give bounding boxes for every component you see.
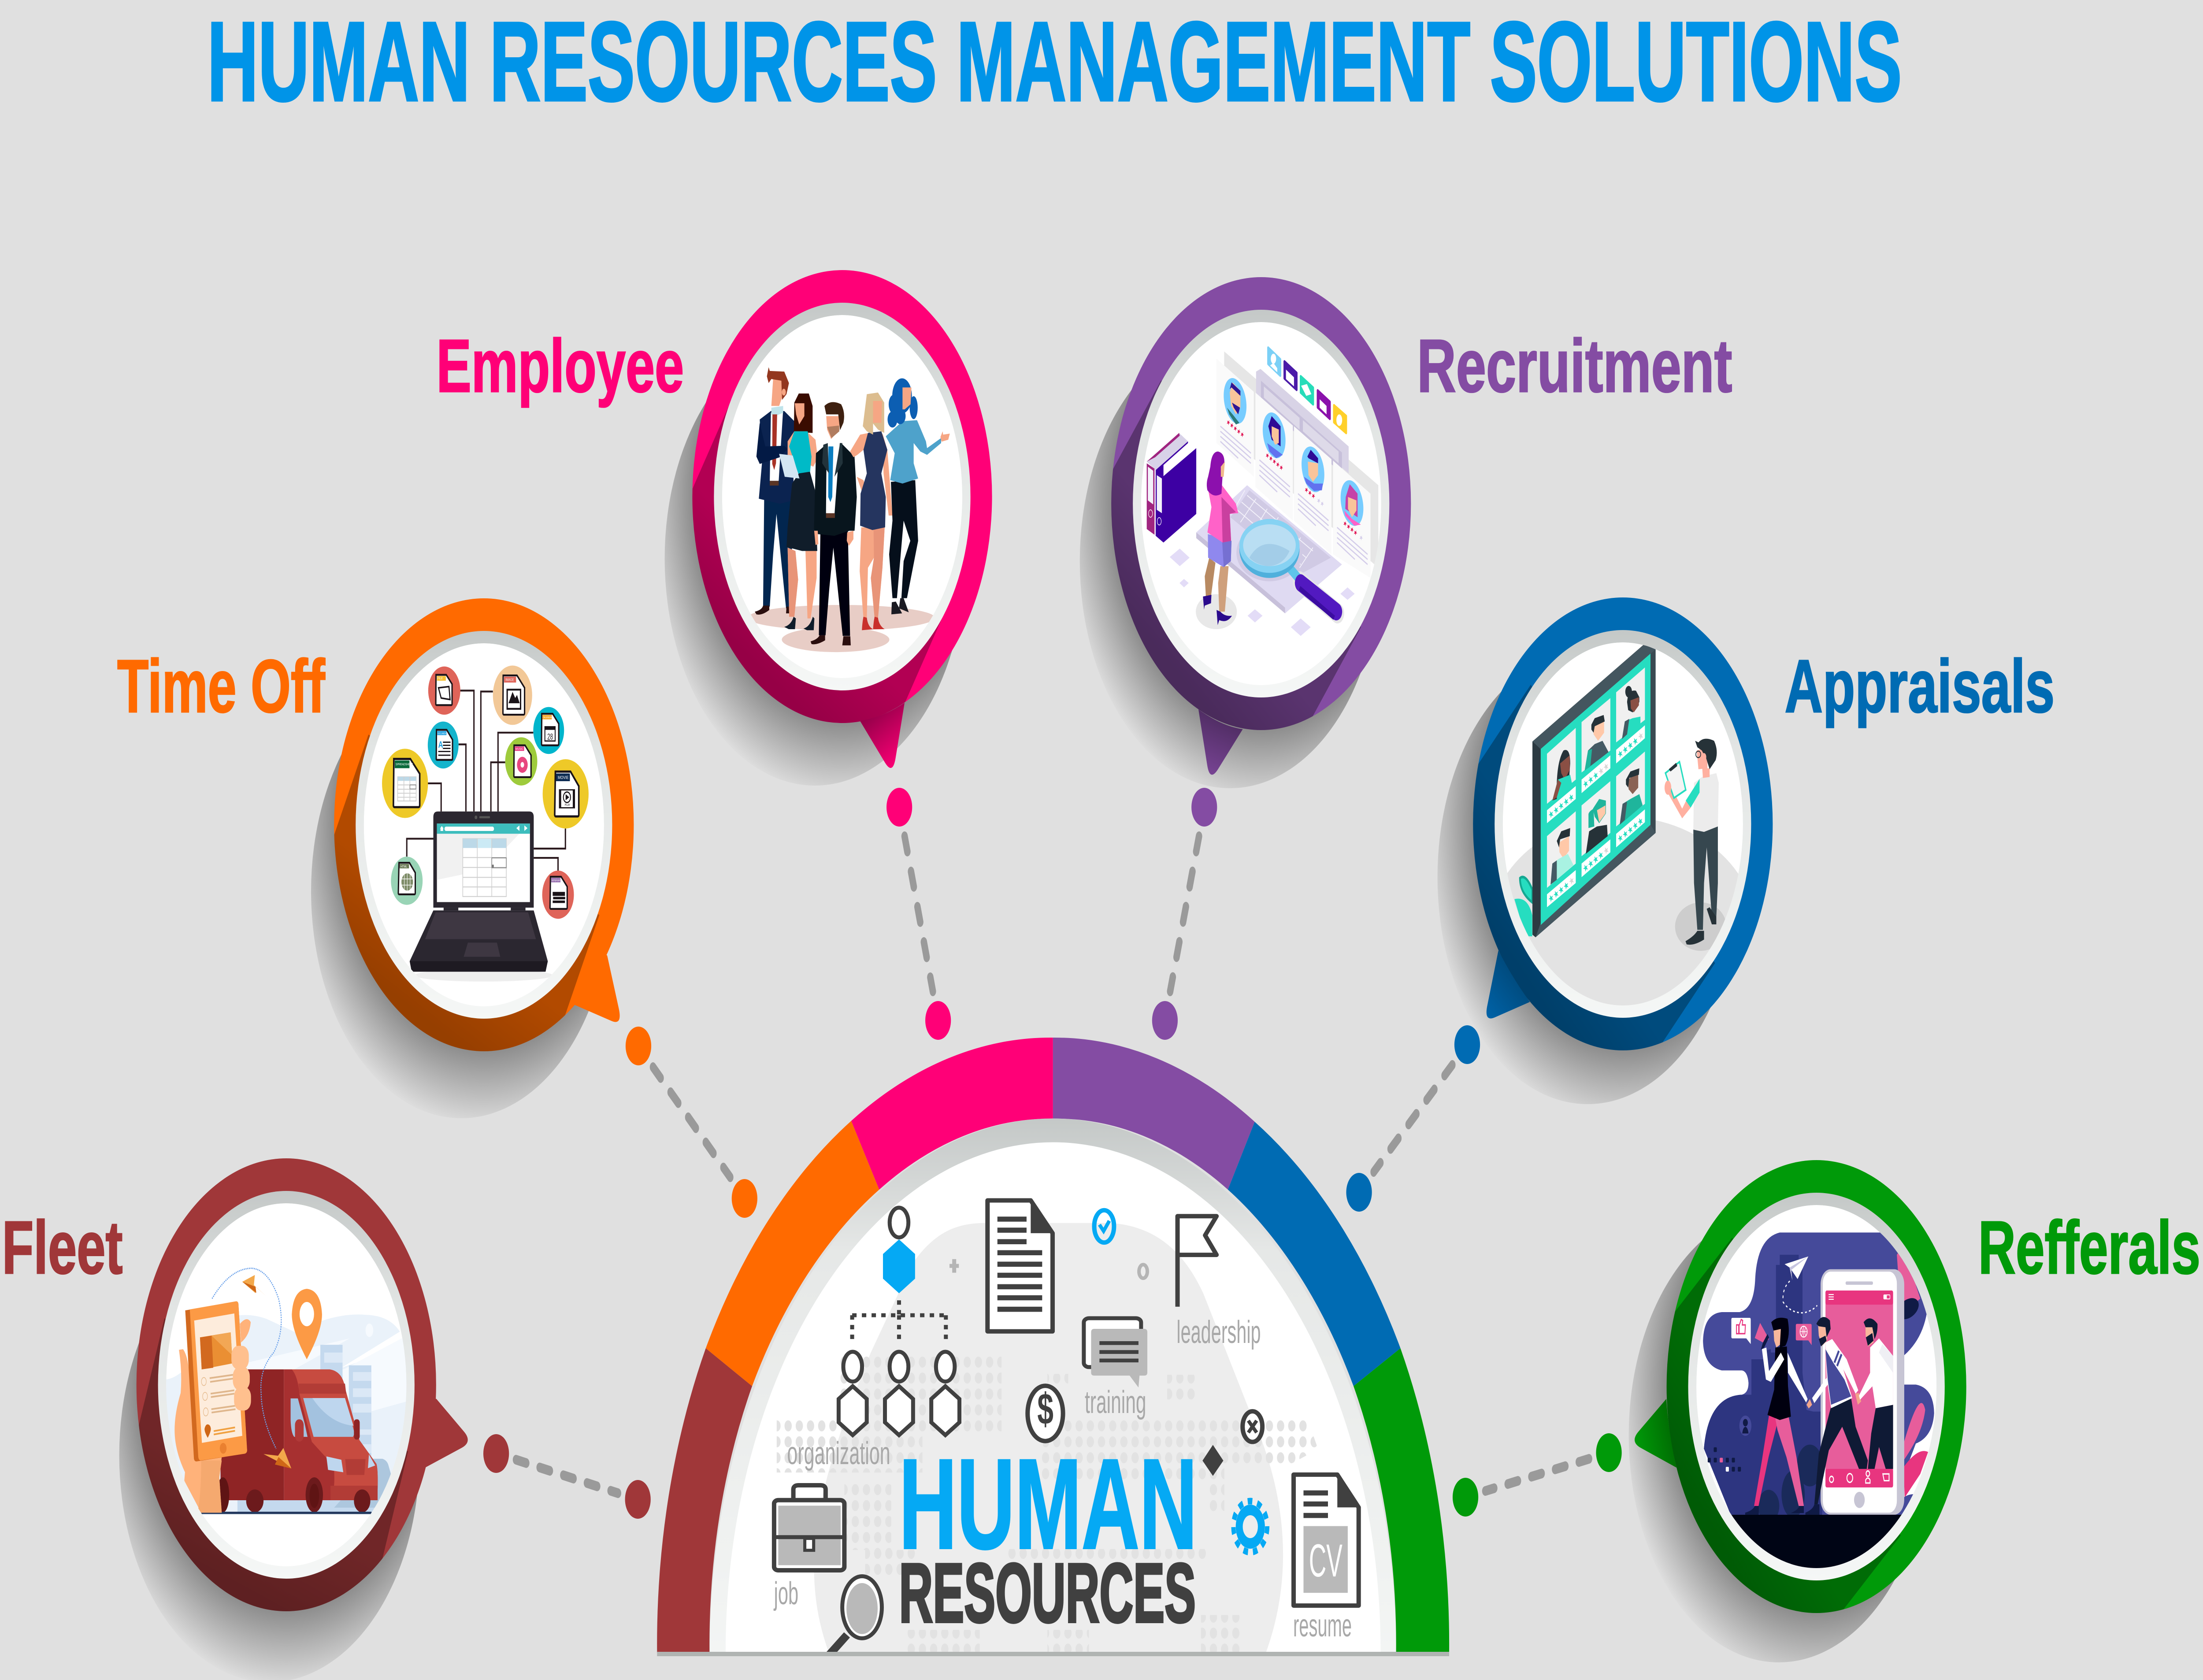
- file icon: document: A: [438, 739, 443, 750]
- inner ring: [709, 1118, 1396, 1653]
- paper planes and path: [212, 1268, 291, 1469]
- pointer dot: Employee: [886, 788, 912, 827]
- file icon: calendar: [533, 707, 564, 754]
- arc anchor dot: Employee: [925, 1001, 951, 1040]
- illustration: laptop with file icons: [364, 643, 604, 1006]
- connector lines: [407, 690, 565, 871]
- inner ring: Appraisals: [1495, 630, 1751, 1018]
- CV text: CV: [1309, 1534, 1343, 1586]
- candidate card 1: ★★★★★: [1225, 417, 1245, 439]
- paper plane: [1783, 1257, 1817, 1313]
- man in black suit: [811, 402, 857, 645]
- plant: [1514, 877, 1532, 936]
- ring: Time Off: [334, 598, 634, 1051]
- phone: [1821, 1269, 1904, 1515]
- file icon: document: DOCUMENT: [438, 732, 447, 734]
- candidate card 2: [1255, 393, 1293, 521]
- long shadow band: Appraisals: [1386, 685, 1715, 1182]
- portrait card row 1 col 2: ★★★: [1581, 768, 1600, 790]
- woman with teal top: [779, 393, 818, 630]
- pointer dot: Appraisals: [1454, 1025, 1480, 1064]
- label: Appraisals: Appraisals: [1785, 645, 2055, 728]
- connector: Time Off: [653, 1067, 730, 1177]
- connector: Recruitment: [1170, 836, 1199, 991]
- portrait card row 2 col 1: ★: [1567, 874, 1576, 887]
- rating frame: [1532, 645, 1656, 937]
- icon: flag: [1178, 1216, 1216, 1307]
- portrait card row 1 col 1: ★★★★★: [1547, 790, 1576, 821]
- connector: Refferals: [1485, 1459, 1589, 1491]
- word: training: training: [1085, 1384, 1146, 1420]
- candidate card 4: ★: [1358, 533, 1364, 542]
- world map backdrop: [777, 1223, 1318, 1652]
- bubble: Fleet: [95, 1158, 509, 1680]
- floor: [747, 605, 935, 652]
- long shadow band: Recruitment: [1033, 380, 1361, 864]
- inner ring: Recruitment: [1133, 310, 1389, 697]
- file icon: music: MUSIC: [516, 747, 523, 751]
- candidate card 3: ★★★: [1303, 485, 1317, 501]
- icon: diamond: [1202, 1445, 1224, 1476]
- icon: document: [987, 1201, 1053, 1331]
- icon: CV document: [1294, 1475, 1359, 1606]
- hub white panel with icons: [700, 1101, 1399, 1674]
- tail: Employee: [860, 703, 905, 768]
- purple backdrop: [1703, 1232, 1934, 1522]
- arc anchor dot: Time Off: [732, 1179, 757, 1218]
- portrait card row 2 col 2: [1581, 781, 1610, 877]
- woman inspecting: [1196, 452, 1238, 629]
- inner ring: Employee: [714, 303, 971, 690]
- portrait card row 2 col 1: [1547, 811, 1576, 907]
- file icon: movie: PLAY: [565, 803, 570, 807]
- illustration: Fleet delivery van: [166, 1203, 407, 1566]
- portrait card row 1 col 3: ★: [1636, 729, 1645, 742]
- file icon: movie: [543, 759, 589, 828]
- portrait card row 2 col 2: ★: [1602, 843, 1610, 857]
- label: Refferals: Refferals: [1978, 1206, 2200, 1290]
- icon: cancel: [1242, 1411, 1262, 1442]
- pointer dot: Fleet: [483, 1434, 509, 1473]
- portrait card row 1 col 2: ★★: [1597, 760, 1610, 778]
- ground: [1699, 1515, 1945, 1589]
- arc segment: Refferals: [1354, 1348, 1449, 1653]
- portrait card row 1 col 2: [1581, 698, 1610, 793]
- arc anchor dot: Refferals: [1453, 1478, 1478, 1517]
- van: [201, 1369, 378, 1514]
- arc anchor dot: Appraisals: [1346, 1173, 1372, 1212]
- portrait card row 1 col 1: [1547, 728, 1576, 823]
- label: Recruitment: Recruitment: [1417, 324, 1732, 408]
- file icon: file: [428, 667, 460, 715]
- illustration: referral people and phone: [1696, 1205, 1945, 1589]
- word: organization: organization: [787, 1435, 890, 1471]
- back screens: [1224, 351, 1378, 568]
- portrait card row 2 col 1: ★★★★: [1547, 879, 1570, 905]
- icon: magnifier: [829, 1576, 882, 1655]
- arc segment: Time Off: [706, 1121, 879, 1386]
- magnifying glass: [1236, 519, 1338, 618]
- tail: Refferals: [1635, 1399, 1676, 1468]
- hand holding phone: [174, 1301, 251, 1513]
- scenery: [166, 1314, 407, 1514]
- candidate card 4: [1333, 460, 1371, 578]
- file icon: music: [505, 737, 537, 786]
- shadow: Fleet: [119, 1228, 419, 1680]
- file icon: winrar: WINRAR: [551, 879, 560, 883]
- woman with megaphone: [1745, 1318, 1812, 1515]
- icon: check badge: [1094, 1210, 1114, 1242]
- candidate card 1: [1216, 359, 1254, 477]
- icon: briefcase: [774, 1485, 844, 1570]
- binders: [1147, 433, 1196, 542]
- inner ring: Refferals: [1688, 1193, 1945, 1580]
- shadow: Refferals: [1629, 1209, 1929, 1662]
- long shadow band: Refferals: [1577, 1238, 1901, 1680]
- floor: [1489, 817, 1757, 1046]
- bubble: Recruitment: [1033, 277, 1411, 864]
- long shadow band: Employee: [623, 390, 949, 859]
- file icon: html: HTML: [401, 865, 407, 868]
- laptop: [410, 812, 553, 982]
- inner ring: Fleet: [158, 1191, 415, 1579]
- central hub: Human Resources: [625, 1001, 1478, 1674]
- illustration: recruiting with CV cards: [1141, 322, 1381, 685]
- file icon: winrar: [542, 871, 574, 919]
- ring: Recruitment: [1111, 277, 1411, 730]
- portrait card row 1 col 3: ★★★★: [1616, 734, 1639, 760]
- shadow: Employee: [665, 332, 965, 786]
- man in white shirt: [1859, 1318, 1893, 1469]
- tail: Recruitment: [1198, 709, 1243, 775]
- file icon: html: [391, 857, 423, 905]
- man with clipboard: [1665, 739, 1719, 945]
- man with red tie: [755, 367, 794, 615]
- woman with blue hair: [886, 378, 950, 614]
- candidate card 2: ★★★★★: [1265, 450, 1284, 472]
- ring: Appraisals: [1473, 597, 1773, 1050]
- label: Employee: Employee: [436, 324, 684, 408]
- label: Time Off: Time Off: [117, 645, 326, 728]
- icon: org chart: [838, 1208, 959, 1435]
- base line: [657, 1652, 1449, 1656]
- shadow: Recruitment: [1080, 334, 1380, 788]
- inner ring: Time Off: [356, 631, 612, 1019]
- file icon: document: [428, 722, 459, 768]
- connector: Fleet: [516, 1460, 618, 1493]
- candidate card 4: ★★★★: [1342, 519, 1358, 538]
- man in varsity jacket: [1806, 1317, 1868, 1515]
- small marks: [949, 1259, 1147, 1278]
- bubble: Employee: [623, 270, 992, 859]
- file icon: calendar: CALENDAR: [543, 716, 553, 719]
- label: Fleet: Fleet: [2, 1206, 123, 1290]
- connector: Appraisals: [1374, 1065, 1452, 1172]
- tail: Appraisals: [1487, 950, 1530, 1018]
- file icon: image: IMAGE: [505, 678, 514, 682]
- blonde woman: [850, 393, 893, 630]
- arc segment: Recruitment: [1053, 1038, 1255, 1190]
- title: HUMAN RESOURCES MANAGEMENT SOLUTIONS: [207, 0, 1902, 124]
- word: HUMAN: HUMAN: [899, 1433, 1197, 1576]
- icon: gear: [1233, 1501, 1267, 1552]
- ring: Fleet: [137, 1158, 468, 1611]
- connector: Employee: [905, 836, 933, 991]
- candidate card 3: [1294, 426, 1331, 554]
- portrait card row 2 col 2: ★★★★: [1581, 848, 1605, 875]
- file icon: movie: MOVIE: [558, 775, 568, 780]
- illustration: appraisal wall: [1489, 642, 1757, 1046]
- arc anchor dot: Fleet: [625, 1480, 651, 1519]
- word: job: job: [773, 1576, 798, 1611]
- like bubble: [1731, 1318, 1751, 1344]
- file icon: image: [493, 666, 532, 725]
- keyboard platform: [1196, 485, 1342, 613]
- word: resume: resume: [1293, 1608, 1352, 1643]
- file icon: spreadsheet: [382, 749, 428, 818]
- long shadow band: Fleet: [139, 1318, 408, 1611]
- icon tiles: [1268, 348, 1346, 433]
- pointer dot: Refferals: [1596, 1433, 1622, 1472]
- file icon: file: FILE: [438, 677, 443, 680]
- illustration: team of employees: [722, 315, 962, 678]
- candidate card 3: ★★: [1316, 496, 1325, 508]
- shadow: Appraisals: [1438, 650, 1738, 1104]
- bubble: Time Off: [274, 598, 651, 1190]
- portrait card row 1 col 3: [1616, 668, 1645, 764]
- long shadow band: Time Off: [274, 734, 599, 1190]
- bubble: Appraisals: [1386, 597, 1773, 1182]
- icon: chat bubble: [1084, 1318, 1147, 1387]
- bubble: Refferals: [1577, 1160, 1966, 1680]
- word: RESOURCES: RESOURCES: [899, 1546, 1196, 1640]
- icon: dollar coin: [1027, 1386, 1063, 1441]
- ring: Refferals: [1667, 1160, 1966, 1613]
- dollar sign: $: [1037, 1384, 1053, 1433]
- portrait card row 2 col 3: ★★★★★: [1616, 814, 1645, 845]
- arc segment: Appraisals: [1228, 1122, 1401, 1386]
- floor tiles: [1170, 549, 1355, 636]
- portrait card row 2 col 3: [1616, 752, 1645, 847]
- arc anchor dot: Recruitment: [1152, 1001, 1178, 1040]
- location pin: [292, 1289, 322, 1359]
- pointer dot: Time Off: [626, 1027, 651, 1065]
- pointer dot: Recruitment: [1191, 788, 1217, 827]
- arc segment: Fleet: [657, 1348, 752, 1653]
- file icon: spreadsheet: SPREADSHEET: [396, 763, 413, 767]
- globe bubble: [1796, 1324, 1812, 1345]
- shadow: Time Off: [311, 664, 611, 1118]
- ring: Employee: [692, 270, 992, 723]
- file icon: calendar: 28: [547, 731, 553, 742]
- arc segment: Employee: [851, 1038, 1053, 1190]
- word: leadership: leadership: [1176, 1314, 1261, 1350]
